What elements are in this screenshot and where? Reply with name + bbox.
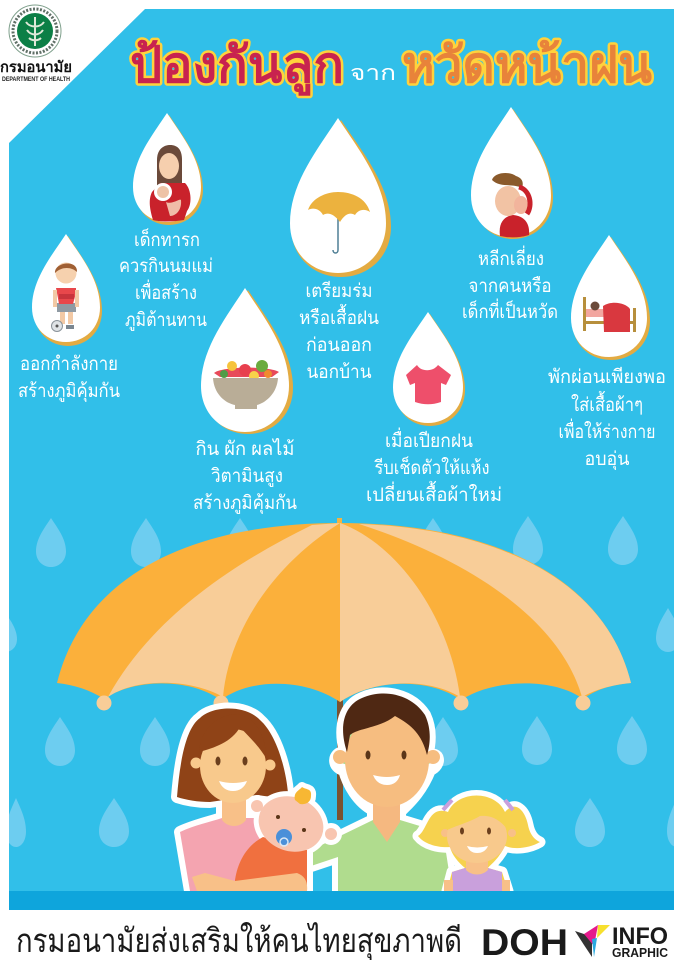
icon: boy with ball xyxy=(52,262,79,332)
text xyxy=(548,366,666,471)
umbrella canopy xyxy=(57,523,631,702)
text: เด็กทารก xyxy=(134,227,200,251)
text: เพื่อสร้าง xyxy=(135,279,197,304)
footer logo: DOH infographic: INFO xyxy=(612,923,668,950)
text: เปลี่ยนเสื้อผ้าใหม่ xyxy=(366,481,502,506)
bottom strip xyxy=(9,891,674,910)
text: เตรียมร่ม xyxy=(306,280,372,302)
footer logo: DOH infographic xyxy=(481,922,669,960)
tip: breastfeeding xyxy=(119,113,213,331)
logo: department of health: กรมอนามัย xyxy=(0,59,72,76)
text: หรือเสื้อฝน xyxy=(299,304,379,329)
text: หลีกเลี่ยง xyxy=(478,245,544,270)
footer slogan: กรมอนามัยส่งเสริมให้คนไทยสุขภาพดี xyxy=(16,922,462,960)
tip: rest xyxy=(548,235,666,471)
woman xyxy=(177,708,307,891)
text: จากคนหรือ xyxy=(468,276,552,297)
text xyxy=(119,227,213,331)
man xyxy=(305,693,452,891)
baby xyxy=(192,787,337,891)
tip: umbrella xyxy=(290,118,391,383)
title: ป้องกันลูก xyxy=(130,37,344,96)
text: ใส่เสื้อผ้าๆ xyxy=(571,391,643,416)
title xyxy=(130,37,652,96)
tip: change clothes xyxy=(366,312,502,506)
text xyxy=(462,245,558,323)
title: หวัดหน้าฝน xyxy=(402,37,652,93)
icon: bed xyxy=(583,297,636,332)
text xyxy=(18,354,120,403)
text: ออกกำลังกาย xyxy=(20,354,118,375)
icon: mother and baby xyxy=(150,145,191,222)
logo: department of health: DEPARTMENT OF HEALTH xyxy=(2,77,70,83)
icon: fruit bowl xyxy=(213,360,279,409)
text: วิตามินสูง xyxy=(211,466,283,487)
text: พักผ่อนเพียงพอ xyxy=(548,366,666,388)
large umbrella xyxy=(57,518,631,820)
text xyxy=(193,438,297,515)
text: กิน ผัก ผลไม้ xyxy=(196,438,294,460)
text: ภูมิต้านทาน xyxy=(125,310,207,331)
title: จาก xyxy=(350,62,396,85)
text: สร้างภูมิคุ้มกัน xyxy=(18,381,120,403)
family xyxy=(177,693,540,891)
tip: avoid sick people xyxy=(462,107,558,323)
girl xyxy=(418,796,540,891)
text xyxy=(366,427,502,506)
icon: shirt xyxy=(406,365,451,404)
rain drops background xyxy=(0,516,687,847)
text: เมื่อเปียกฝน xyxy=(385,427,473,452)
text: รีบเช็ดตัวให้แห้ง xyxy=(374,455,490,479)
tip: exercise xyxy=(18,234,120,403)
text: สร้างภูมิคุ้มกัน xyxy=(193,493,297,515)
icon: origami bird xyxy=(575,925,610,957)
logo: department of health xyxy=(0,5,72,83)
text: อบอุ่น xyxy=(584,449,630,471)
icon: sick person xyxy=(492,173,530,237)
footer logo: DOH infographic: GRAPHIC xyxy=(612,945,669,960)
icon: umbrella xyxy=(308,192,370,253)
text: ควรกินนมแม่ xyxy=(119,256,213,277)
text: เพื่อให้ร่างกาย xyxy=(558,418,656,443)
text: เด็กที่เป็นหวัด xyxy=(462,298,558,323)
text: ก่อนออก xyxy=(306,335,372,356)
text: นอกบ้าน xyxy=(306,362,372,383)
tip: fruit and vegetables xyxy=(193,288,297,515)
text xyxy=(299,280,379,383)
